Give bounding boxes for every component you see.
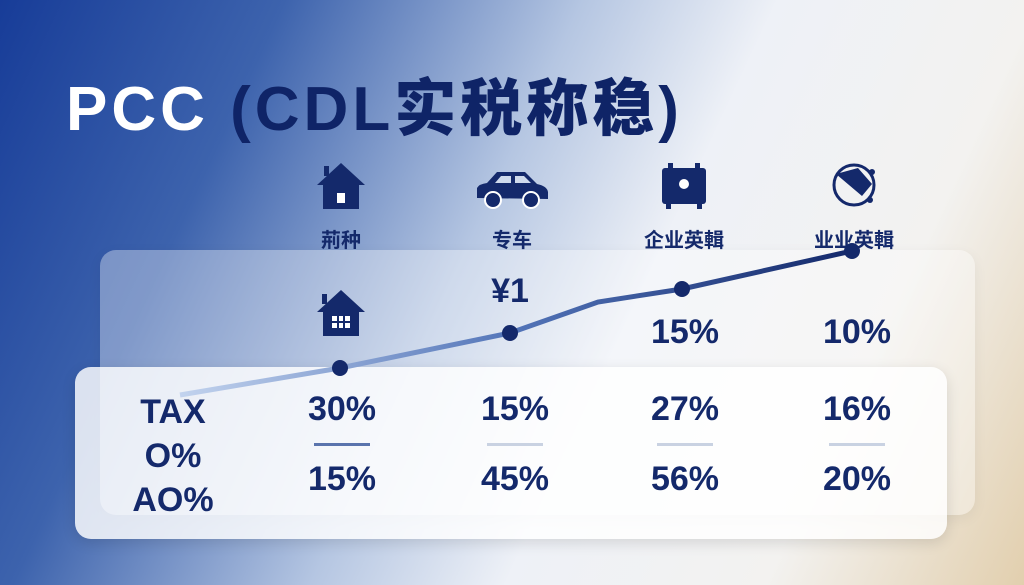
table row labels — [132, 393, 214, 519]
icon: car — [477, 172, 548, 209]
table row labels: O% — [145, 437, 201, 475]
column 2: 15% 45% — [481, 390, 549, 498]
column 3: 27% 56% — [651, 390, 719, 498]
value: 10%: 10% — [823, 313, 891, 351]
label: 企业英輯: 企业英輯 — [644, 230, 724, 252]
column 4: 16% 20% — [823, 390, 891, 498]
icon: small house — [317, 290, 365, 336]
column 1: 30% 15% — [308, 390, 376, 498]
icon: cabinet — [662, 163, 706, 209]
icon: rotating car — [832, 164, 876, 206]
icon: house — [317, 163, 365, 209]
label: 专车: 专车 — [492, 230, 532, 252]
value: ¥1: ¥1 — [491, 272, 529, 310]
table row labels: AO% — [132, 481, 214, 519]
title: PCC (CDL实税称稳) — [66, 75, 683, 144]
panel: lower table card — [75, 367, 947, 539]
table row labels: TAX — [140, 393, 206, 431]
panel: upper card — [100, 250, 975, 515]
label: 荊种: 荊种 — [321, 230, 361, 252]
label: 业业英輯: 业业英輯 — [814, 230, 894, 252]
value: 15%: 15% — [651, 313, 719, 351]
